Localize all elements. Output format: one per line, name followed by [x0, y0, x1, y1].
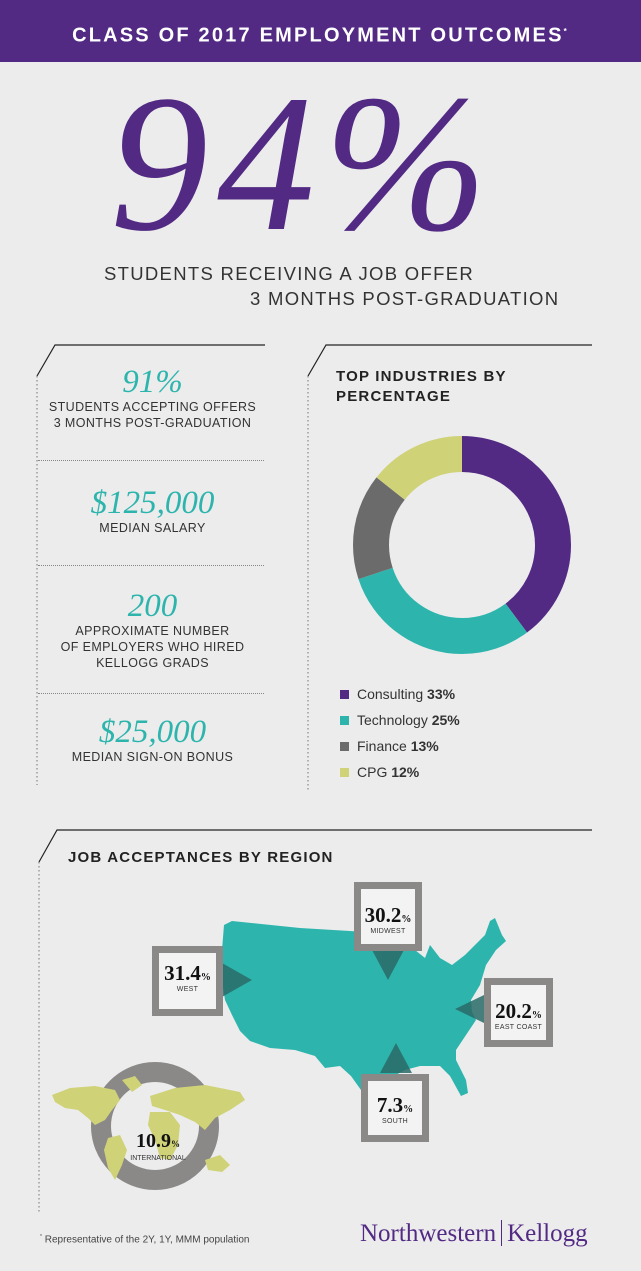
big number 94%: 94% [110, 55, 496, 272]
subtitle [104, 263, 559, 309]
header bar: CLASS OF 2017 EMPLOYMENT OUTCOMES* [72, 25, 569, 47]
subtitle: 3 MONTHS POST-GRADUATION [250, 288, 559, 309]
stat: 91% [49, 364, 256, 430]
industries heading [336, 368, 507, 405]
stat: employers: OF EMPLOYERS WHO HIRED [61, 640, 244, 654]
globe ring [101, 1072, 209, 1180]
industries heading: TOP INDUSTRIES BY [336, 368, 507, 385]
industries heading: PERCENTAGE [336, 388, 451, 405]
stat: 91%: 3 MONTHS POST-GRADUATION [54, 416, 251, 430]
stat: sign-on bonus: MEDIAN SIGN-ON BONUS [72, 750, 233, 764]
region heading: JOB ACCEPTANCES BY REGION [68, 849, 334, 866]
stat: employers: APPROXIMATE NUMBER [75, 624, 230, 638]
stat: median salary: $125,000 [91, 485, 214, 521]
stat: sign-on bonus [72, 714, 233, 764]
footnote: * Representative of the 2Y, 1Y, MMM population [40, 1234, 250, 1245]
box: south: SOUTH [382, 1118, 408, 1125]
box: south: 7.3% [377, 1093, 413, 1117]
international label: INTERNATIONAL [130, 1155, 186, 1162]
stat: employers: 200 [128, 588, 177, 624]
US map [222, 918, 506, 1096]
international label: 10.9% [136, 1130, 180, 1152]
box: east coast [484, 978, 553, 1047]
header bar [0, 0, 641, 62]
world map [52, 1076, 245, 1180]
box: east coast: 20.2% [495, 999, 542, 1023]
donut chart [353, 436, 571, 654]
box: midwest: 30.2% [365, 903, 411, 927]
stat: 91%: STUDENTS ACCEPTING OFFERS [49, 400, 256, 414]
stat: employers: KELLOGG GRADS [96, 656, 209, 670]
legend: Consulting 33% [357, 686, 455, 702]
arrows [222, 950, 484, 1073]
stat: sign-on bonus: $25,000 [99, 714, 206, 750]
stat: employers [61, 588, 244, 670]
text: Finance 13% [357, 738, 439, 754]
text: Technology 25% [357, 712, 460, 728]
stat: median salary: MEDIAN SALARY [99, 521, 206, 535]
text: CPG 12% [357, 764, 419, 780]
box: midwest: MIDWEST [370, 928, 406, 935]
stat: 91%: 91% [122, 364, 183, 400]
box: west: WEST [177, 986, 198, 993]
international label [130, 1130, 186, 1162]
box: midwest [354, 882, 422, 951]
box: west [152, 946, 223, 1016]
box: south [361, 1074, 429, 1142]
logo: Northwestern Kellogg [360, 1220, 588, 1247]
box: east coast: EAST COAST [495, 1024, 542, 1031]
subtitle: STUDENTS RECEIVING A JOB OFFER [104, 263, 474, 284]
box: west: 31.4% [164, 961, 211, 985]
